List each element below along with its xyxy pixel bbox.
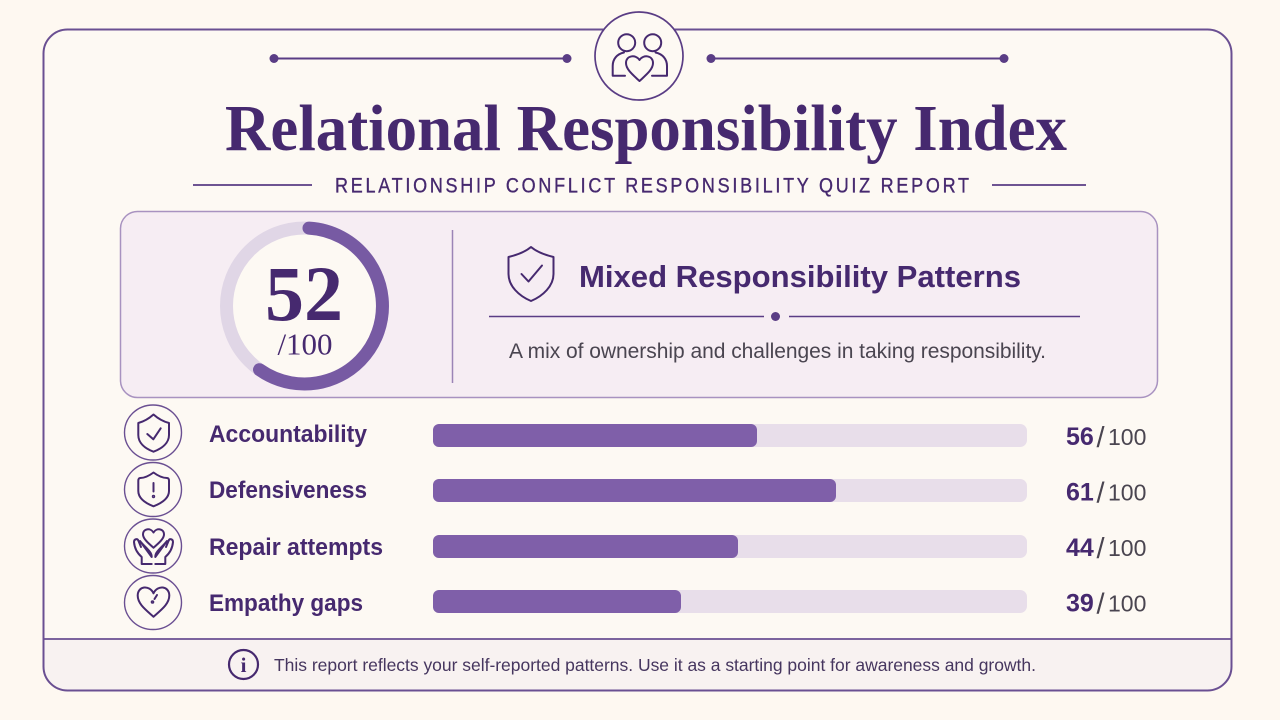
bar: 61 (433, 479, 1027, 502)
header ornament left (270, 54, 572, 63)
icon: hands holding heart (124, 519, 182, 573)
row: repair attempts (124, 519, 1146, 573)
row: accountability: / (1096, 422, 1106, 454)
row: defensiveness: 100 (1108, 480, 1146, 506)
title: Relational Responsibility Index (225, 92, 1067, 165)
score ring: /100 (277, 326, 333, 362)
icon: shield check (124, 405, 182, 460)
footer note (229, 650, 1036, 679)
icon: shield check (508, 247, 554, 301)
bar: 44 (433, 535, 1027, 558)
score ring: 52 (265, 250, 343, 337)
icon: info (229, 650, 258, 679)
row: defensiveness: Defensiveness (209, 477, 367, 504)
row: empathy gaps (124, 576, 1146, 630)
bar: 39 (433, 590, 1027, 613)
footer note: This report reflects your self-reported patterns. Use it as a starting point for awareness and growth. (274, 655, 1036, 675)
row: empathy gaps: 100 (1108, 590, 1146, 616)
row: accountability (124, 405, 1146, 460)
bar: 56 (433, 424, 1027, 447)
header ornament right (706, 54, 1008, 63)
row: empathy gaps: / (1096, 588, 1106, 620)
row: accountability: 100 (1108, 424, 1146, 450)
row: defensiveness: 61 (1066, 478, 1094, 506)
status heading: Mixed Responsibility Patterns (579, 259, 1021, 294)
status description: A mix of ownership and challenges in taking responsibility. (509, 340, 1046, 363)
row: accountability: 56 (1066, 423, 1094, 451)
icon: shield alert (124, 462, 182, 516)
icon: info: i (241, 653, 247, 677)
subtitle: RELATIONSHIP CONFLICT RESPONSIBILITY QUIZ REPORT (335, 174, 969, 198)
status divider (489, 312, 1080, 321)
row: defensiveness (124, 462, 1146, 516)
score ring (226, 228, 382, 384)
row: repair attempts: / (1096, 533, 1106, 565)
icon: two people with heart (595, 12, 683, 100)
row: accountability: Accountability (209, 421, 368, 448)
row: repair attempts: Repair attempts (209, 534, 383, 561)
icon: cracked heart (124, 576, 182, 630)
row: empathy gaps: 39 (1066, 590, 1094, 618)
row: repair attempts: 100 (1108, 535, 1146, 561)
panel: overall score (120, 212, 1158, 398)
row: empathy gaps: Empathy gaps (209, 590, 363, 617)
row: repair attempts: 44 (1066, 534, 1094, 562)
row: defensiveness: / (1096, 478, 1106, 510)
